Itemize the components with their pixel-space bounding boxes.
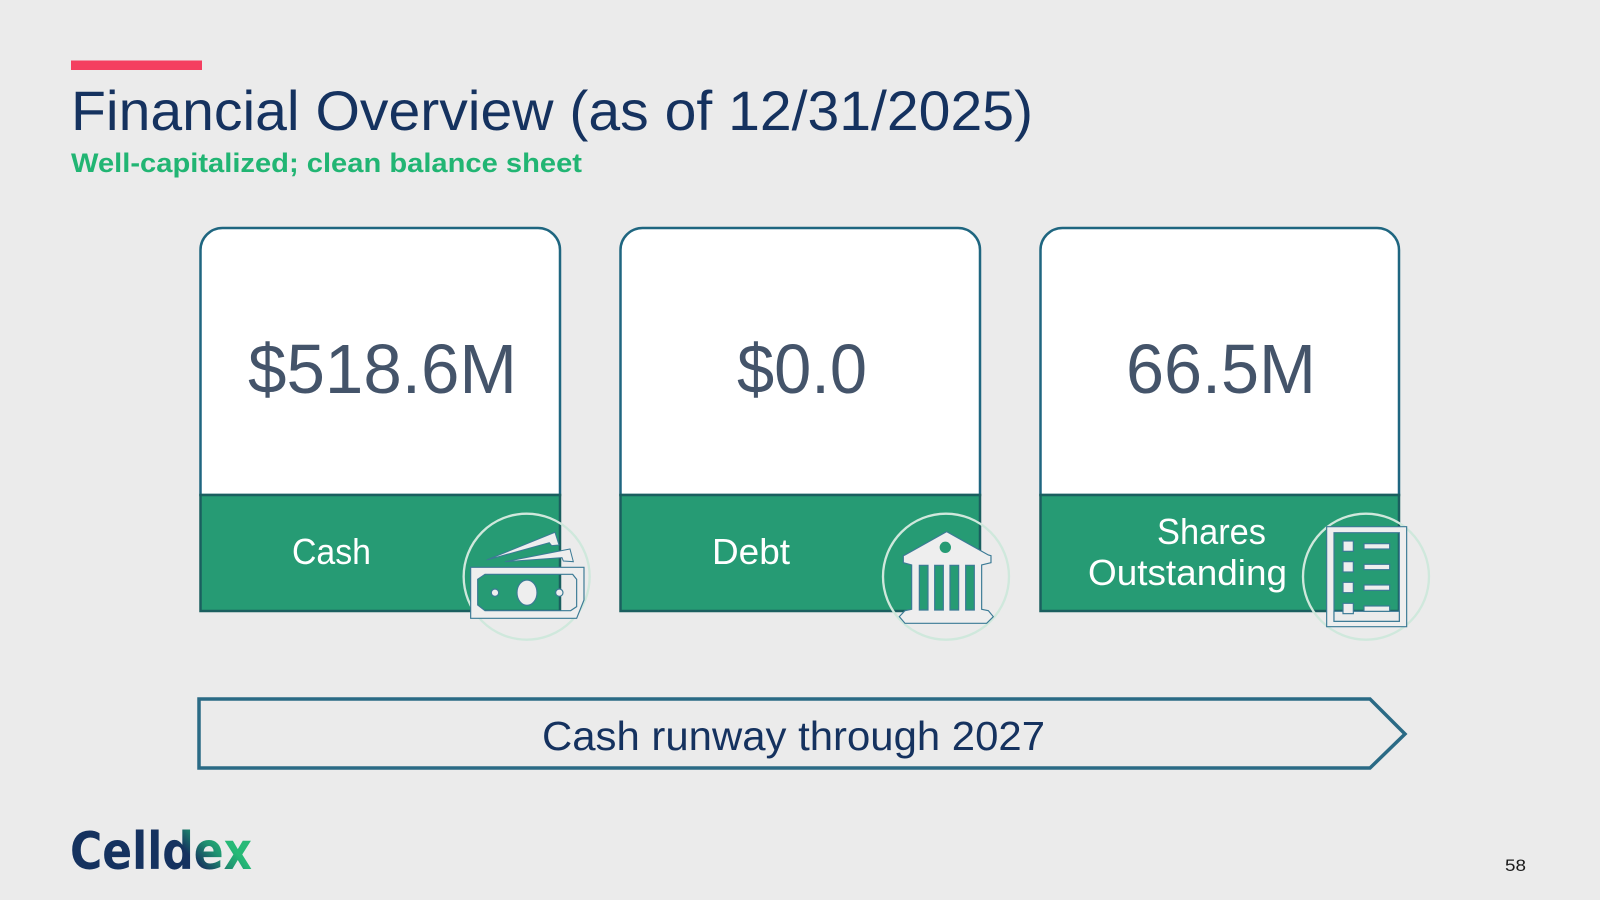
subtitle: Well-capitalized; clean balance sheet: [71, 148, 582, 178]
label: shares: [1088, 511, 1287, 593]
value: cash: $518.6M: [248, 330, 517, 408]
card body: [1040, 228, 1399, 495]
icon: money: [464, 514, 590, 640]
card body: [200, 228, 560, 495]
callout arrow: [199, 699, 1405, 768]
label: cash: Cash: [292, 531, 371, 572]
panel: shares outstanding: [1040, 228, 1429, 640]
value: debt: $0.0: [737, 330, 867, 408]
value: shares: 66.5M: [1126, 330, 1316, 408]
icon: checklist: [1303, 514, 1429, 640]
label: shares: Shares: [1157, 511, 1266, 552]
callout text: Cash runway through 2027: [542, 713, 1045, 759]
label band: [620, 495, 980, 611]
panel: debt: [620, 228, 1009, 640]
panel: cash: [200, 228, 590, 640]
card body: [620, 228, 980, 495]
label: shares: Outstanding: [1088, 552, 1287, 593]
label: debt: Debt: [712, 531, 790, 572]
icon: bank: [883, 514, 1009, 640]
page number: 58: [1505, 856, 1526, 875]
accent bar: [71, 60, 202, 70]
logo: Celldex: [70, 822, 252, 882]
label band: [1040, 495, 1399, 611]
label band: [200, 495, 560, 611]
title: Financial Overview (as of 12/31/2025): [71, 79, 1033, 142]
